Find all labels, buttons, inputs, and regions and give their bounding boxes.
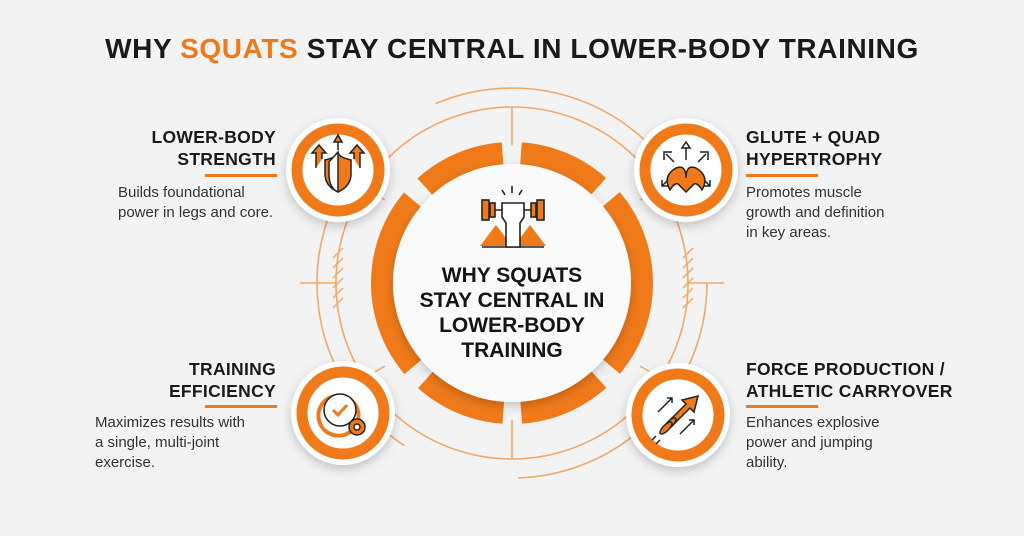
block: glute quad bbox=[746, 127, 884, 241]
text: FORCE PRODUCTION / bbox=[746, 359, 945, 379]
text: in key areas. bbox=[746, 224, 831, 241]
center title: LOWER-BODY bbox=[439, 314, 585, 337]
block: training efficiency bbox=[95, 359, 277, 471]
icon: explosive arrow bbox=[652, 396, 698, 444]
segmented ring bbox=[382, 153, 642, 413]
icon: clock gear bbox=[318, 394, 365, 436]
title: WHY SQUATS STAY CENTRAL IN LOWER-BODY TRAINING bbox=[105, 33, 919, 64]
icon circles bbox=[286, 118, 738, 467]
center title bbox=[420, 264, 604, 362]
text: Builds foundational bbox=[118, 184, 245, 201]
text: EFFICIENCY bbox=[169, 381, 276, 401]
text: power in legs and core. bbox=[118, 204, 273, 221]
icon: muscle arrows bbox=[662, 142, 710, 192]
center title: TRAINING bbox=[461, 339, 563, 362]
text: Enhances explosive bbox=[746, 414, 879, 431]
text: ATHLETIC CARRYOVER bbox=[746, 381, 953, 401]
text: LOWER-BODY bbox=[151, 127, 276, 147]
center title: WHY SQUATS bbox=[442, 264, 582, 287]
text: Promotes muscle bbox=[746, 184, 862, 201]
icon: shield arrows bbox=[312, 135, 364, 192]
text: power and jumping bbox=[746, 434, 873, 451]
block: lower-body strength bbox=[118, 127, 277, 221]
text: a single, multi-joint bbox=[95, 434, 219, 451]
text: GLUTE + QUAD bbox=[746, 127, 880, 147]
text: HYPERTROPHY bbox=[746, 149, 883, 169]
text: growth and definition bbox=[746, 204, 884, 221]
text: Maximizes results with bbox=[95, 414, 245, 431]
center title: STAY CENTRAL IN bbox=[420, 289, 604, 312]
text: exercise. bbox=[95, 454, 155, 471]
icon: dumbbell fist bbox=[480, 186, 546, 247]
text: TRAINING bbox=[189, 359, 276, 379]
text: STRENGTH bbox=[177, 149, 276, 169]
block: force production bbox=[746, 359, 953, 471]
text: ability. bbox=[746, 454, 787, 471]
